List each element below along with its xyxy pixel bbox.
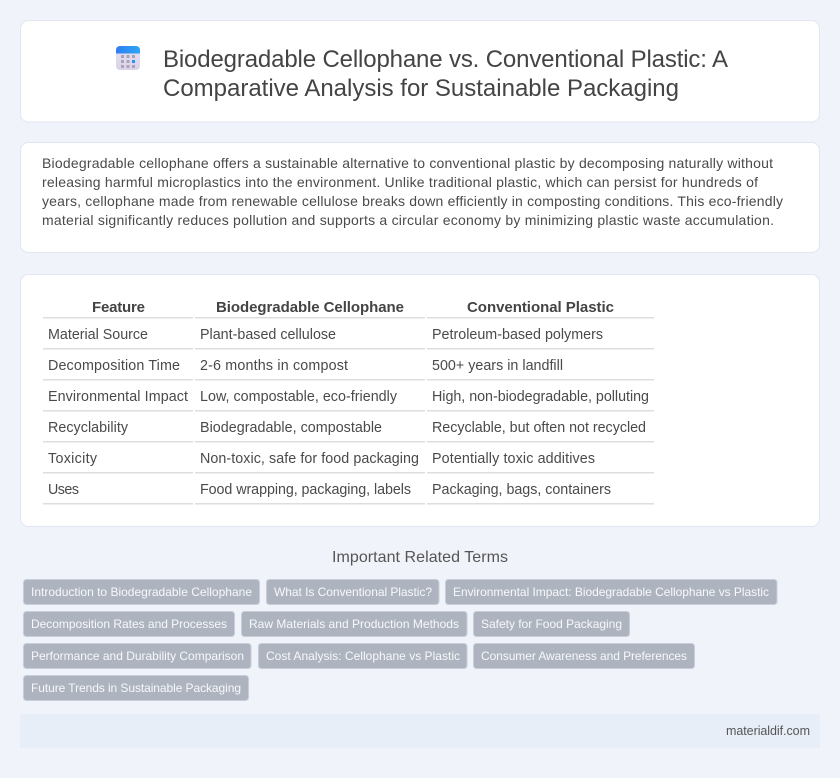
row: toxicity: Toxicity <box>48 451 98 467</box>
tag: Safety for Food Packaging <box>481 617 622 631</box>
summary text: material significantly reduces pollution and supports a circular economy by minimizing plastic waste accumulation. <box>42 212 774 228</box>
tag <box>474 644 694 668</box>
row: material source: Material Source <box>48 327 148 343</box>
tag: Cost Analysis: Cellophane vs Plastic <box>266 649 460 663</box>
row: material source: Plant-based cellulose <box>200 327 336 343</box>
table header: Conventional Plastic <box>467 299 614 316</box>
panel: summary paragraph <box>20 142 820 252</box>
heading: related terms: Important Related Terms <box>332 549 508 566</box>
row: recyclability: Recyclability <box>48 420 129 436</box>
tag <box>24 580 260 604</box>
row: material source <box>48 327 603 343</box>
tag cloud: related terms <box>24 580 777 700</box>
row: decomposition time <box>48 358 563 374</box>
row: material source: Petroleum-based polymers <box>432 327 603 343</box>
panel: header <box>20 20 820 122</box>
row: toxicity: Potentially toxic additives <box>432 451 595 467</box>
row: uses: Packaging, bags, containers <box>432 482 611 498</box>
row: toxicity <box>48 451 595 467</box>
table header: Biodegradable Cellophane <box>216 299 404 316</box>
tag: Environmental Impact: Biodegradable Cellophane vs Plastic <box>453 585 769 599</box>
title: Biodegradable Cellophane vs. Conventional Plastic: A <box>163 46 728 73</box>
tag <box>24 644 251 668</box>
summary text: years, cellophane made from renewable cellulose breaks down efficiently in composting conditions. This eco-friendly <box>42 193 783 209</box>
tag: What Is Conventional Plastic? <box>274 585 432 599</box>
title: Comparative Analysis for Sustainable Packaging <box>163 75 679 102</box>
tag: Introduction to Biodegradable Cellophane <box>31 585 252 599</box>
row: recyclability <box>48 420 646 436</box>
row: uses: Food wrapping, packaging, labels <box>200 482 411 498</box>
tag: Consumer Awareness and Preferences <box>481 649 687 663</box>
tag: Performance and Durability Comparison <box>31 649 244 663</box>
row: uses: Uses <box>48 482 79 498</box>
icon: calendar grid <box>116 46 140 70</box>
tag <box>446 580 777 604</box>
tag <box>242 612 467 636</box>
row: uses <box>48 482 611 498</box>
row: toxicity: Non-toxic, safe for food packaging <box>200 451 419 467</box>
tag <box>258 644 467 668</box>
tag <box>24 676 248 700</box>
summary text: Biodegradable cellophane offers a sustainable alternative to conventional plastic by decomposing naturally without <box>42 155 773 171</box>
row: environmental impact: Low, compostable, eco-friendly <box>200 389 398 405</box>
summary text: releasing harmful microplastics into the environment. Unlike traditional plastic, which can persist for hundreds of <box>42 174 758 190</box>
row: decomposition time: 2-6 months in compost <box>200 358 348 374</box>
tag <box>266 580 439 604</box>
table header <box>92 299 614 316</box>
row: recyclability: Recyclable, but often not recycled <box>432 420 646 436</box>
row: decomposition time: Decomposition Time <box>48 358 180 374</box>
panel: comparison table <box>20 274 820 526</box>
tag: Decomposition Rates and Processes <box>31 617 227 631</box>
row: recyclability: Biodegradable, compostable <box>200 420 382 436</box>
tag <box>474 612 630 636</box>
tag: Future Trends in Sustainable Packaging <box>31 681 241 695</box>
row: environmental impact <box>48 389 649 405</box>
row: environmental impact: High, non-biodegradable, polluting <box>432 389 649 405</box>
row: environmental impact: Environmental Impact <box>48 389 188 405</box>
footer <box>20 714 820 748</box>
footer source: materialdif.com <box>726 724 810 738</box>
row: decomposition time: 500+ years in landfill <box>432 358 563 374</box>
tag: Raw Materials and Production Methods <box>249 617 459 631</box>
tag <box>24 612 234 636</box>
table header: Feature <box>92 299 145 316</box>
